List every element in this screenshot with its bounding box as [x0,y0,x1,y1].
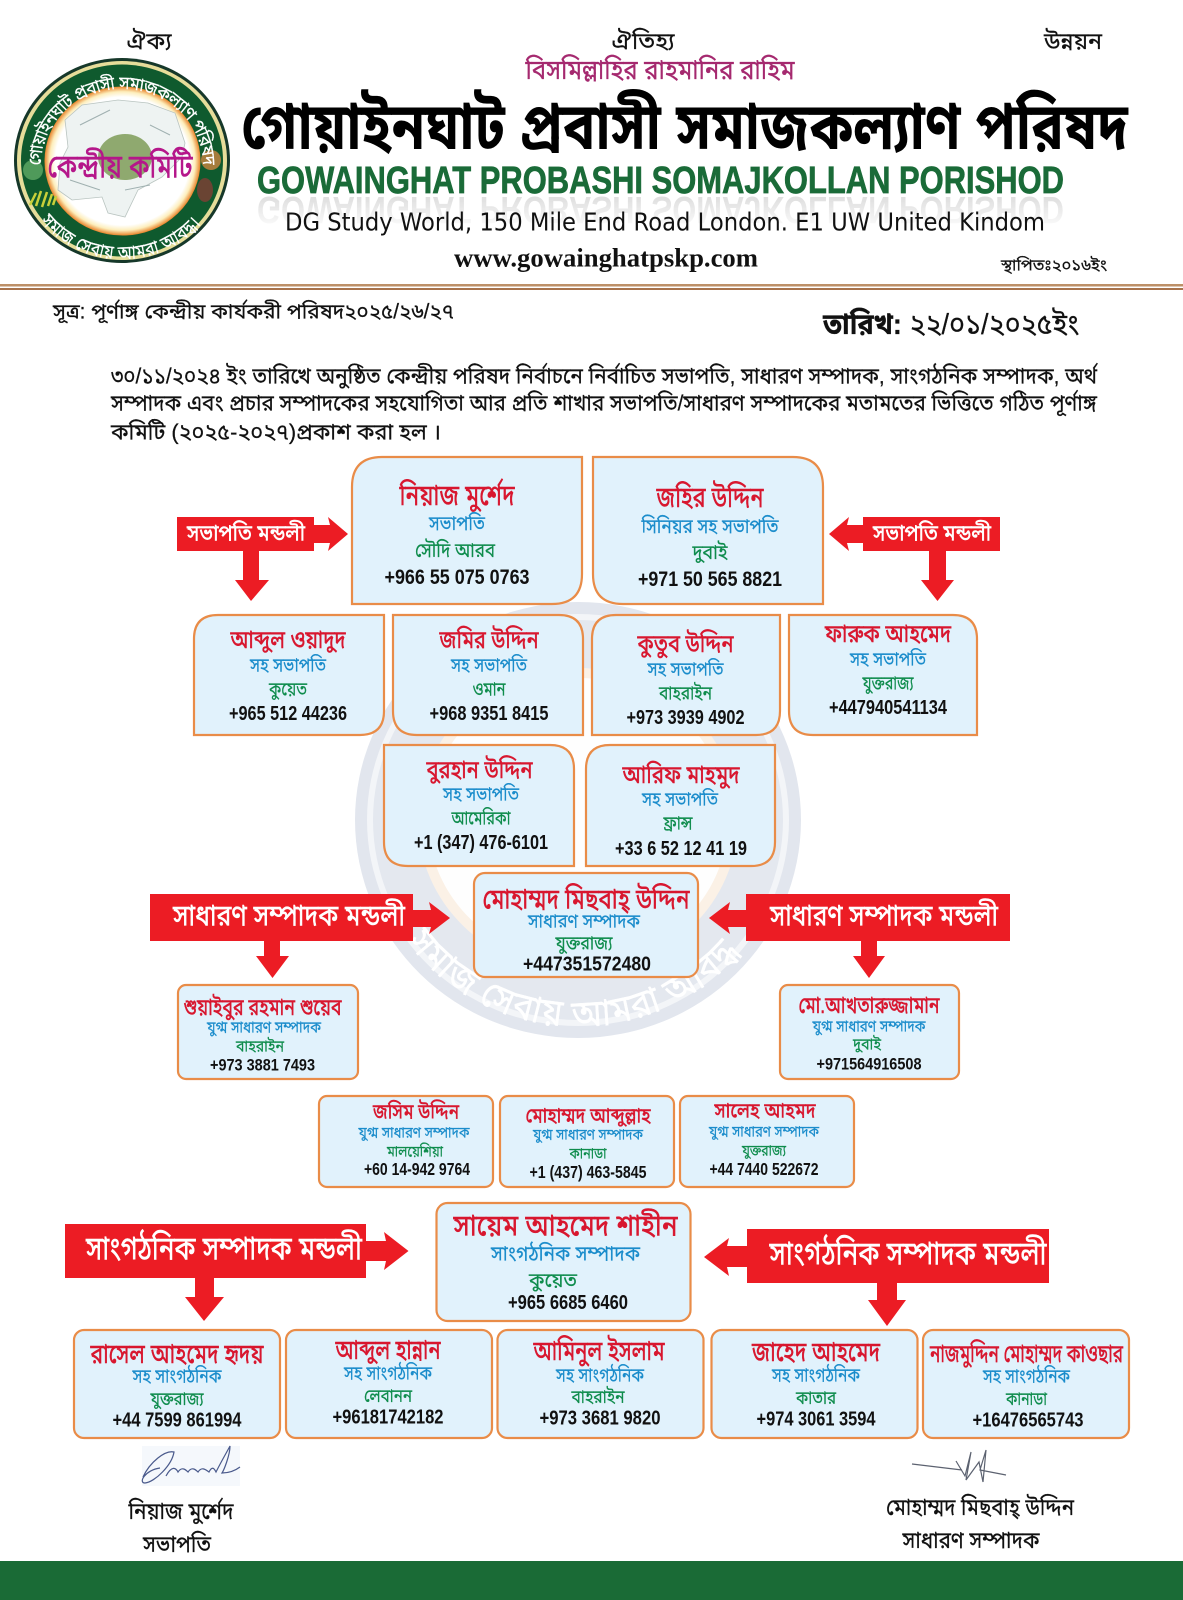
name: বুরহান উদ্দিন [426,755,533,784]
reference line: সূত্র: পূর্ণাঙ্গ কেন্দ্রীয় কার্যকরী পরিষদ২০২৫/২৬/২৭ [52,298,454,324]
country: যুক্তরাজ্য [150,1389,204,1410]
intro paragraph: ৩০/১১/২০২৪ ইং তারিখে অনুষ্ঠিত কেন্দ্রীয় পরিষদ নির্বাচনে নির্বাচিত সভাপতি, সাধারণ সম্পাদক, সাংগঠনিক সম্পাদক, অর্থ [111,362,1099,390]
intro paragraph: সম্পাদক এবং প্রচার সম্পাদকের সহযোগিতা আর প্রতি শাখার সভাপতি/সাধারণ সম্পাদকের মতামতের ভিত্তিতে গঠিত পূর্ণাঙ্গ [110,390,1098,416]
role: সহ সাংগঠনিক [555,1364,645,1386]
watermark emblem [355,602,801,1038]
header motto: unity: ঐক্য [126,28,172,54]
phone: +16476565743 [972,1408,1084,1432]
established year: স্থাপিতঃ২০১৬ইং [1000,256,1107,275]
country: যুক্তরাজ্য [862,674,914,694]
country: দুবাই [692,540,728,564]
name: সায়েম আহমেদ শাহীন [453,1208,678,1242]
role: সহ সভাপতি [641,788,718,810]
header motto: development: উন্নয়ন [1043,28,1103,54]
arrow banner: general secretary board left: সাধারণ সম্পাদক মন্ডলী [172,898,406,932]
phone: +44 7599 861994 [112,1408,242,1432]
phone: +447351572480 [523,952,651,976]
name: আব্দুল হান্নান [335,1335,441,1365]
panel: vice president USA [384,745,574,866]
name: আমিনুল ইসলাম [533,1335,665,1367]
president role: সভাপতি [142,1531,212,1557]
role: যুগ্ম সাধারণ সম্পাদক [708,1124,820,1140]
website: www.gowainghatpskp.com [454,244,758,272]
role: সিনিয়র সহ সভাপতি [641,514,779,538]
role: সহ সাংগঠনিক [343,1362,433,1384]
header motto: tradition: ঐতিহ্য [612,28,675,54]
role: সভাপতি [428,511,486,535]
panel: joint general secretary Dubai [780,985,959,1079]
arrow banner: president board left: সভাপতি মন্ডলী [186,520,306,546]
country: কুয়েত [268,680,307,700]
country: ওমান [472,680,506,700]
country: আমেরিকা [451,806,511,830]
footer bar [0,1561,1183,1600]
panel: senior vice president [593,457,823,604]
phone: +973 3939 4902 [626,707,744,729]
panel: general secretary [474,873,698,977]
name: আরিফ মাহমুদ [622,760,740,789]
name: ফারুক আহমেদ [824,620,952,648]
panel: president [352,457,582,604]
role: যুগ্ম সাধারণ সম্পাদক [358,1124,470,1142]
logo emblem: গোয়াইনঘাট প্রবাসী সমাজকল্যাণ পরিষদ [30,74,214,165]
country: কুয়েত [528,1270,578,1292]
panel: joint general secretary Canada [500,1096,674,1187]
panel: joint general secretary Malaysia [319,1096,493,1187]
panel: assistant organiser Lebanon [286,1330,492,1438]
country: দুবাই [852,1034,881,1054]
logo emblem: সমাজ সেবায় আমরা আবদ্ধ। [43,212,200,259]
arrow banner: general secretary board right: সাধারণ সম্পাদক মন্ডলী [769,898,999,932]
date: তারিখ: ২২/০১/২০২৫ইং [822,308,1079,341]
logo emblem [14,58,230,263]
phone: +1 (347) 476-6101 [414,832,548,854]
role: যুগ্ম সাধারণ সম্পাদক [206,1020,322,1036]
panel: assistant organiser Bahrain [498,1330,704,1438]
name: জাহেদ আহমেদ [751,1337,881,1367]
panel: organising secretary [436,1203,690,1321]
arrow banner: general secretary board right [709,894,1010,978]
panel: assistant organiser Qatar [712,1330,918,1438]
panel: vice president Kuwait [194,615,384,735]
country: বাহরাইন [658,682,712,704]
logo emblem: কেন্দ্রীয় কমিটি [48,146,193,184]
name: জমির উদ্দিন [439,625,539,654]
name: কুতুব উদ্দিন [637,629,734,659]
phone: +968 9351 8415 [430,703,548,725]
country: যুক্তরাজ্য [555,934,613,954]
name: নিয়াজ মুর্শেদ [399,478,515,512]
country: বাহরাইন [235,1036,284,1056]
general secretary name: মোহাম্মদ মিছবাহ্ উদ্দিন [886,1494,1075,1520]
bismillah line: বিসমিল্লাহির রাহমানির রাহিম [525,54,795,85]
phone: +33 6 52 12 41 19 [615,838,747,860]
arrow banner: organising secretary board left [65,1224,408,1321]
panel: assistant organiser UK [74,1330,280,1438]
country: বাহরাইন [571,1387,626,1407]
panel: vice president France [586,745,775,866]
phone: +1 (437) 463-5845 [530,1162,647,1182]
name: শুয়াইবুর রহমান শুয়েব [184,994,342,1021]
country: সৌদি আরব [415,538,496,562]
role: সহ সাংগঠনিক [771,1364,861,1386]
general secretary role: সাধারণ সম্পাদক [902,1527,1040,1553]
role: সহ সভাপতি [450,654,527,676]
name: মো.আখতারুজ্জামান [798,992,940,1018]
phone: +974 3061 3594 [756,1408,876,1430]
president name: নিয়াজ মুর্শেদ [128,1498,234,1525]
role: যুগ্ম সাধারণ সম্পাদক [532,1126,644,1144]
phone: +973 3881 7493 [210,1056,315,1074]
arrow banner: president board right: সভাপতি মন্ডলী [872,520,992,546]
name: রাসেল আহমেদ হৃদয় [90,1339,264,1369]
arrow banner: organising secretary board right [704,1229,1049,1326]
general secretary signature [912,1450,1006,1482]
role: সহ সভাপতি [849,648,926,670]
name: জসিম উদ্দিন [372,1100,459,1124]
name: আব্দুল ওয়াদুদ [230,626,346,654]
phone: +965 512 44236 [229,703,347,725]
country: যুক্তরাজ্য [741,1142,787,1160]
intro paragraph [110,362,1099,444]
country: লেবানন [364,1386,413,1406]
phone: +965 6685 6460 [508,1292,628,1314]
phone: +971564916508 [816,1054,922,1074]
president signature [142,1446,240,1486]
country: কানাডা [1005,1389,1047,1409]
arrow banner: president board left [177,517,348,601]
panel: joint general secretary Bahrain [178,985,358,1079]
role: যুগ্ম সাধারণ সম্পাদক [812,1018,926,1036]
phone: +44 7440 522672 [710,1159,819,1179]
phone: +973 3681 9820 [540,1406,660,1430]
phone: +971 50 565 8821 [638,567,782,591]
name: মোহাম্মদ মিছবাহ্ উদ্দিন [482,882,690,914]
name: সালেহ আহমদ [714,1100,816,1122]
intro paragraph: কমিটি (২০২৫-২০২৭)প্রকাশ করা হল । [110,420,441,444]
watermark emblem: সমাজ সেবায় আমরা আবদ্ধ [413,927,742,1026]
phone: +447940541134 [829,697,948,719]
role: সহ সভাপতি [647,658,724,680]
country: কাতার [795,1388,836,1408]
arrow banner: organising secretary board left: সাংগঠনিক সম্পাদক মন্ডলী [85,1228,363,1266]
role: সহ সাংগঠনিক [132,1364,222,1388]
panel: assistant organiser Canada [923,1330,1129,1438]
role: সহ সাংগঠনিক [982,1364,1071,1388]
panel: vice president Oman [393,615,583,735]
address: DG Study World, 150 Mile End Road London. E1 UW United Kindom [285,208,1045,236]
name: মোহাম্মদ আব্দুল্লাহ [526,1104,651,1128]
country: ফ্রান্স [663,814,693,834]
name: জহির উদ্দিন [656,481,764,514]
arrow banner: organising secretary board right: সাংগঠনিক সম্পাদক মন্ডলী [769,1232,1047,1272]
role: সাংগঠনিক সম্পাদক [490,1242,641,1266]
country: কানাডা [569,1146,607,1162]
country: মালয়েশিয়া [386,1144,444,1160]
arrow banner: president board right [829,517,1000,601]
panel: joint general secretary UK [680,1096,854,1187]
phone: +60 14-942 9764 [364,1159,470,1179]
arrow banner: general secretary board left [150,894,450,978]
role: সহ সভাপতি [442,782,519,806]
role: সহ সভাপতি [249,654,326,676]
panel: vice president UK [789,615,977,735]
phone: +966 55 075 0763 [384,565,530,589]
panel: vice president Bahrain [592,615,780,735]
role: সাধারণ সম্পাদক [527,912,641,932]
phone: +96181742182 [332,1406,444,1428]
